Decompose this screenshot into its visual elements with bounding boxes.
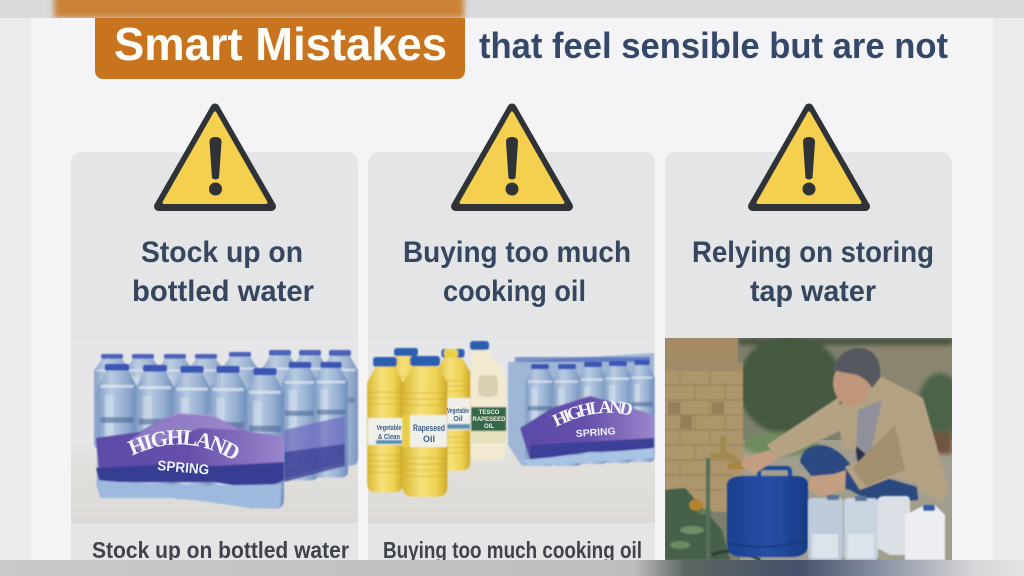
back rows of bottles [94,350,358,466]
icon: warning triangle 3 [752,108,866,206]
subtitle: that feel sensible but are not [479,25,948,66]
man [741,348,948,503]
blue water container [727,468,808,557]
head [832,370,871,406]
caption: card 1: Stock up on bottled water [92,537,349,563]
heading: card 1 [132,236,314,308]
water pack label [552,400,632,440]
water pack back [508,353,655,466]
hedge [738,335,962,456]
heading: card 3: Relying on storing [692,236,934,269]
fence [860,343,952,393]
clear water bottles [808,495,878,560]
brand label [126,430,239,478]
bottom blurred strip [0,560,1024,576]
heading: card 1: bottled water [132,275,314,308]
tap and hose [689,436,760,560]
jug label [472,410,506,430]
oil labels: Rapeseed [413,423,445,433]
caption: card 2: Buying too much cooking oil [383,537,642,563]
title badge: Smart Mistakes [114,18,447,70]
hands [741,450,778,474]
heading: card 2 [403,236,631,308]
brand label: HIGHLAND [126,430,239,458]
jug label: OIL [484,424,494,430]
ground [740,440,952,560]
white jerry cans [877,496,945,560]
oil labels: Vegetable [376,425,402,432]
panel: card 3 background [665,152,952,560]
heading: card 1: Stock up on [141,236,303,269]
photo: man filling containers at an outdoor tap [665,335,962,560]
side bottles [282,362,348,482]
jug label: TESCO [479,410,500,416]
plants [665,488,730,560]
photo: cooking oil and water [366,340,656,523]
brand label: SPRING [157,457,210,478]
brick wall [665,338,743,512]
panel: card 1 background [71,152,358,560]
purple banner [96,412,284,508]
oil labels: Vegetable [447,408,469,415]
jug label: RAPESEED [472,417,506,423]
water pack label: SPRING [575,426,616,440]
photo: bottled water pack [71,349,359,523]
icon: warning triangle 1 [158,108,272,206]
panel: card 2 background [368,152,655,560]
jacket [837,377,948,503]
heading: card 3 [692,236,934,308]
oil labels: & Clean [378,434,400,441]
t-shirt [855,400,882,462]
oil labels: Oil [453,416,463,423]
milk-style jug [470,341,506,460]
heading: card 2: Buying too much [403,236,631,269]
oil labels: Oil [423,434,435,444]
heading: card 3: tap water [750,275,876,308]
arm to the tap [767,397,842,458]
oil labels [376,408,469,444]
water pack label: HIGHLAND [552,400,632,427]
top blurred strip [0,0,1024,18]
icon: warning triangle 2 [456,108,568,206]
front row of bottles [97,364,284,508]
heading: card 2: cooking oil [443,275,586,308]
oil bottles [367,348,470,497]
jeans [800,445,918,503]
